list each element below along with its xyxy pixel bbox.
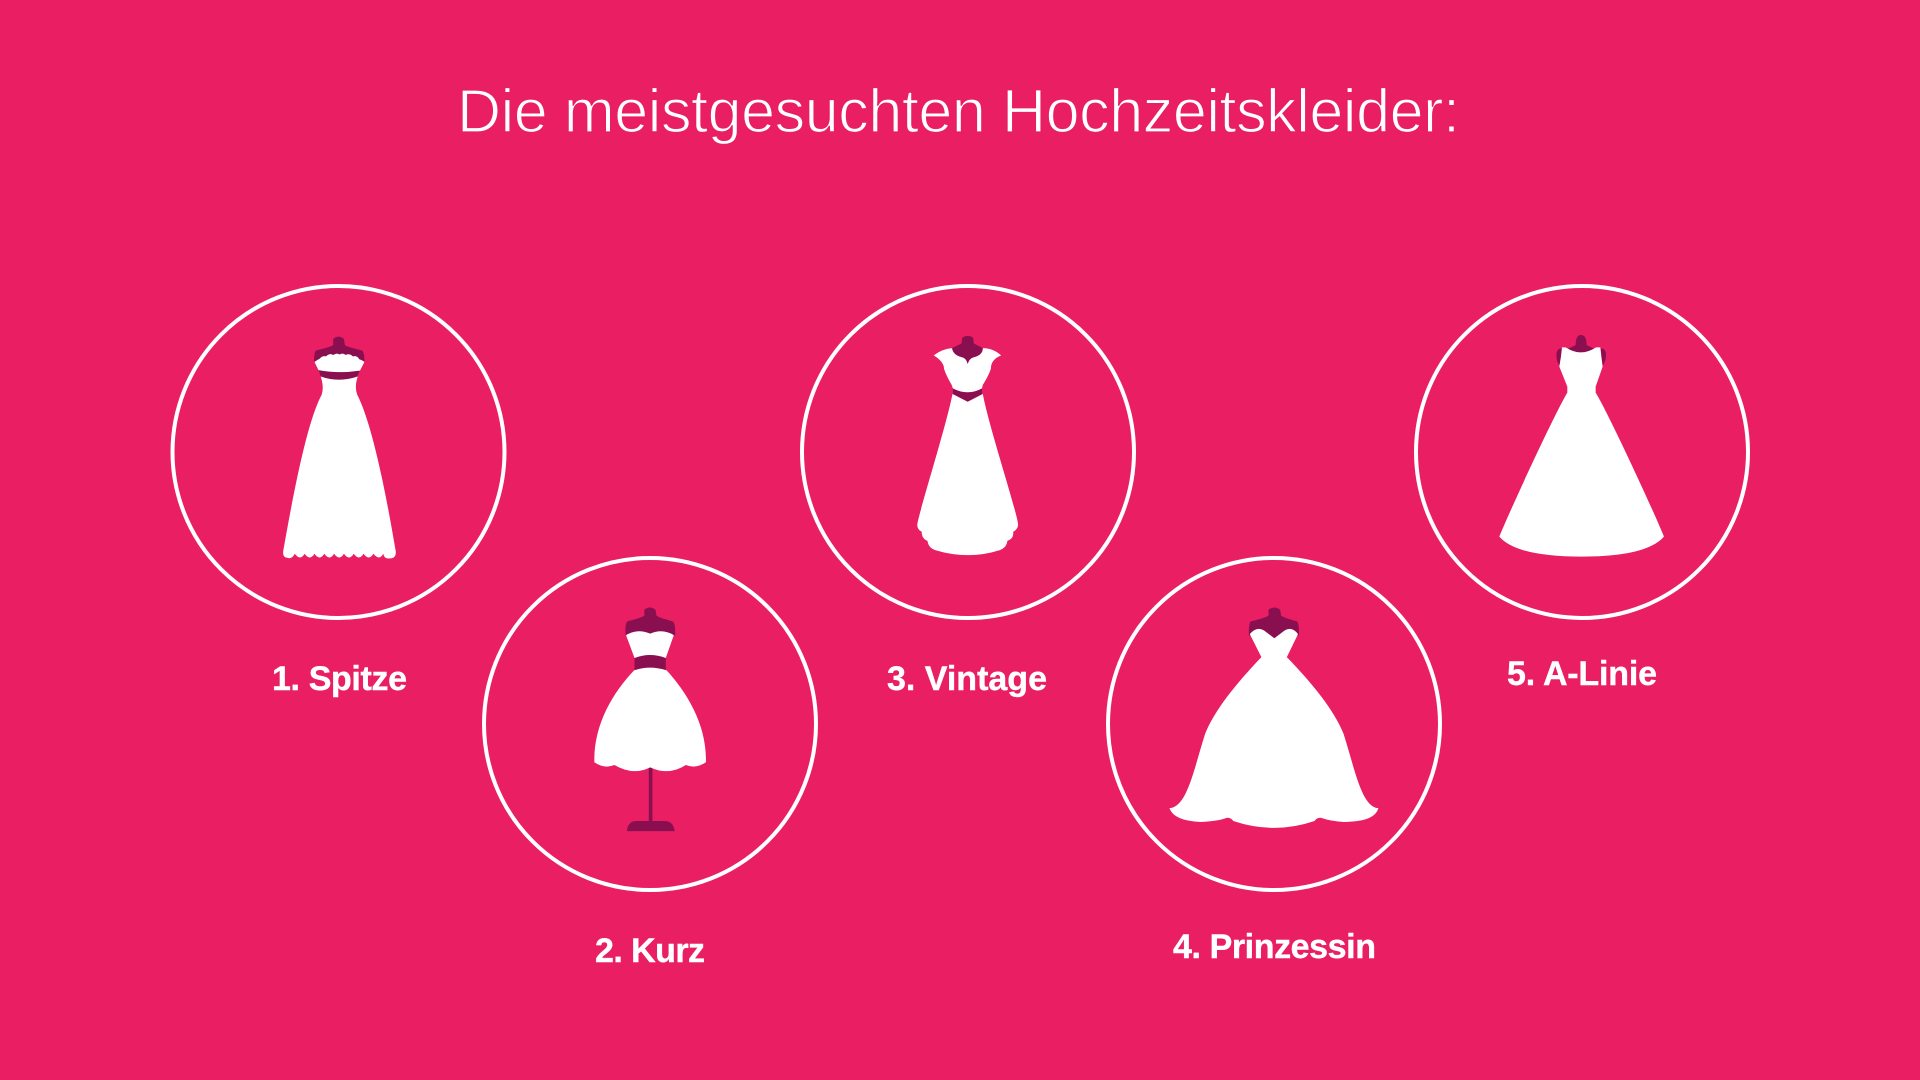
panel: 4. Prinzessin xyxy=(1108,558,1440,966)
icon: princess ball gown on mannequin xyxy=(1169,608,1378,828)
circle ring 3 xyxy=(802,286,1134,618)
icon: short dress on stand xyxy=(594,608,706,831)
label: 1. Spitze: 1. Spitze xyxy=(272,660,407,698)
panel: 5. A-Linie xyxy=(1416,286,1748,693)
label: 5. A-Linie: 5. A-Linie xyxy=(1507,655,1657,693)
title: Die meistgesuchten Hochzeitskleider: xyxy=(457,77,1460,145)
circle ring 4 xyxy=(1108,558,1440,890)
circle ring 5 xyxy=(1416,286,1748,618)
circle ring 1 xyxy=(172,286,504,618)
icon: vintage dress on mannequin xyxy=(917,336,1018,555)
icon: A-line dress on mannequin xyxy=(1499,335,1664,557)
icon: lace dress on mannequin xyxy=(283,337,396,559)
label: 3. Vintage: 3. Vintage xyxy=(887,660,1047,698)
label: 2. Kurz: 2. Kurz xyxy=(595,932,705,970)
panel: 1. Spitze xyxy=(172,286,504,698)
circle ring 2 xyxy=(484,558,816,890)
label: 4. Prinzessin: 4. Prinzessin xyxy=(1173,928,1376,966)
panel: 2. Kurz xyxy=(484,558,816,970)
panel: 3. Vintage xyxy=(802,286,1134,698)
